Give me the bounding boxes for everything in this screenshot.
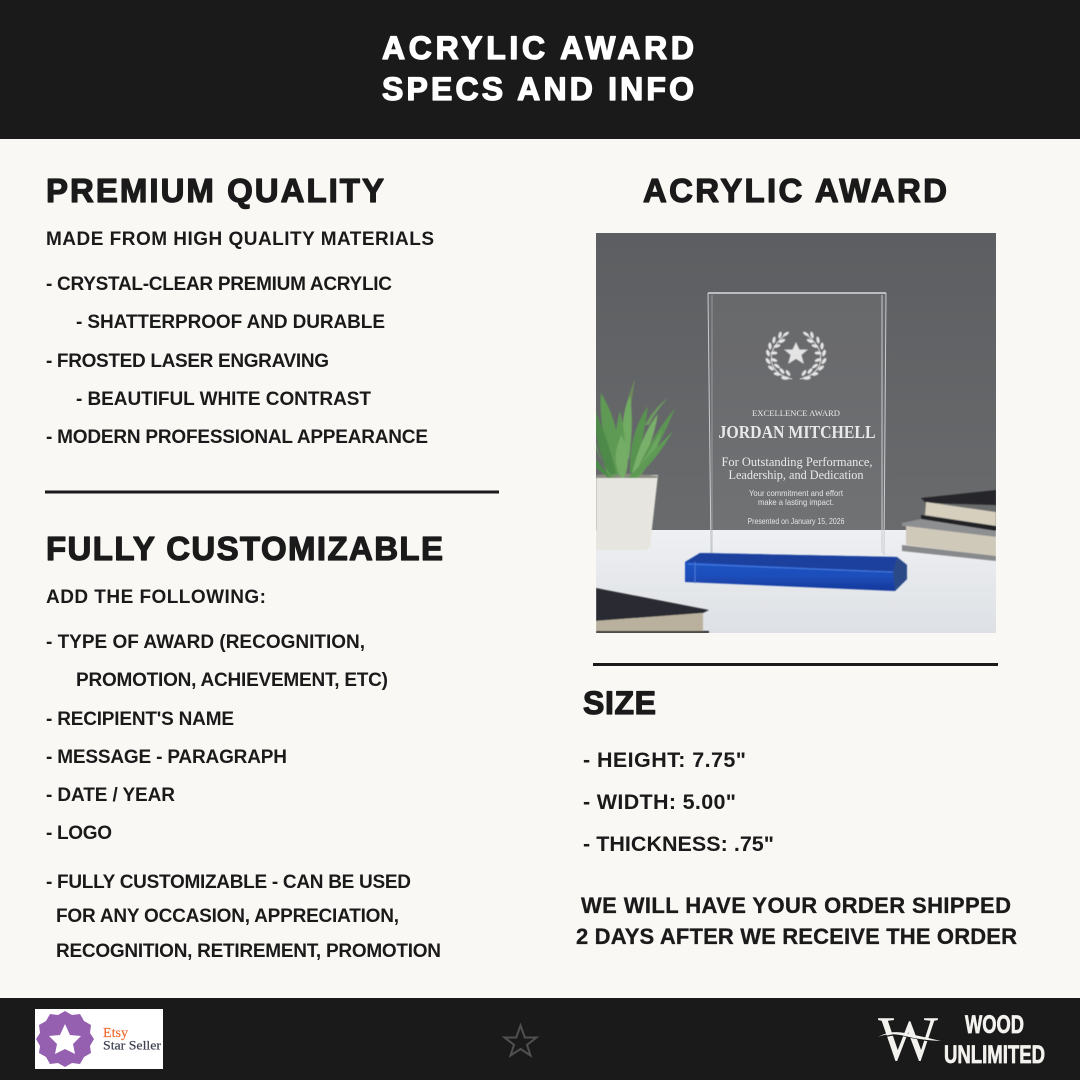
- heading: acrylic award: ACRYLIC AWARD: [643, 172, 947, 209]
- blue base: [685, 553, 907, 591]
- customization list: - FULLY CUSTOMIZABLE - CAN BE USED: [46, 872, 411, 893]
- panel: fully customizable: [46, 530, 443, 962]
- logo wordmark: WOOD: [965, 1011, 1024, 1039]
- quality list: - CRYSTAL-CLEAR PREMIUM ACRYLIC: [46, 274, 392, 295]
- dimensions list: - THICKNESS: .75": [583, 832, 774, 856]
- logo wordmark: UNLIMITED: [944, 1041, 1045, 1069]
- panel: size: [583, 685, 774, 856]
- customization list: RECOGNITION, RETIREMENT, PROMOTION: [56, 941, 441, 962]
- engraved text: [718, 408, 876, 526]
- wall: [596, 233, 996, 531]
- logo: wood unlimited: [878, 1003, 1045, 1074]
- engraved text: Your commitment and effort: [749, 488, 844, 498]
- heading: premium quality: PREMIUM QUALITY: [46, 172, 384, 209]
- engraved text: EXCELLENCE AWARD: [752, 408, 840, 418]
- quality list: - FROSTED LASER ENGRAVING: [46, 351, 329, 372]
- shipping note: 2 DAYS AFTER WE RECEIVE THE ORDER: [576, 924, 1017, 949]
- icon: potted plant: [593, 379, 675, 550]
- badge: etsy star seller: [35, 1009, 163, 1069]
- engraved text: Leadership, and Dedication: [728, 468, 864, 482]
- icon: W monogram: W: [878, 1003, 939, 1074]
- customization list: ADD THE FOLLOWING:: [46, 587, 266, 608]
- dimensions list: - WIDTH: 5.00": [583, 790, 736, 814]
- engraved text: JORDAN MITCHELL: [718, 422, 876, 442]
- quality list: - BEAUTIFUL WHITE CONTRAST: [76, 389, 371, 410]
- quality list: [46, 229, 434, 448]
- shipping note: [576, 893, 1017, 949]
- header band: [0, 0, 1080, 139]
- desk: [596, 530, 996, 633]
- quality list: MADE FROM HIGH QUALITY MATERIALS: [46, 229, 434, 250]
- customization list: - RECIPIENT'S NAME: [46, 709, 234, 730]
- badge text: [103, 1026, 162, 1052]
- product photo: [593, 233, 996, 633]
- quality list: - MODERN PROFESSIONAL APPEARANCE: [46, 427, 428, 448]
- icon: outline star: [504, 1026, 536, 1056]
- title: [382, 30, 694, 107]
- badge text: Star Seller: [103, 1038, 162, 1052]
- icon: purple seal: [36, 1011, 94, 1067]
- customization list: FOR ANY OCCASION, APPRECIATION,: [56, 906, 399, 927]
- dimensions list: - HEIGHT: 7.75": [583, 748, 746, 772]
- shipping note: WE WILL HAVE YOUR ORDER SHIPPED: [581, 893, 1011, 918]
- award: [685, 293, 907, 591]
- customization list: - TYPE OF AWARD (RECOGNITION,: [46, 632, 365, 653]
- heading: size: SIZE: [583, 685, 656, 721]
- customization list: [46, 587, 441, 962]
- engraved text: Presented on January 15, 2026: [748, 516, 845, 526]
- badge text: Etsy: [103, 1026, 128, 1041]
- footer band: [0, 998, 1080, 1080]
- icon: books right: [902, 490, 996, 561]
- icon: book front left: [596, 588, 709, 633]
- acrylic block: [708, 293, 886, 555]
- quality list: - SHATTERPROOF AND DURABLE: [76, 312, 385, 333]
- engraved text: make a lasting impact.: [758, 497, 834, 507]
- title: SPECS AND INFO: [382, 71, 694, 107]
- title: ACRYLIC AWARD: [382, 30, 694, 66]
- logo wordmark: [944, 1011, 1045, 1069]
- heading: fully customizable: FULLY CUSTOMIZABLE: [46, 530, 443, 567]
- customization list: PROMOTION, ACHIEVEMENT, ETC): [76, 670, 388, 691]
- dimensions list: [583, 748, 774, 856]
- customization list: - LOGO: [46, 823, 112, 844]
- icon: laurel star: [765, 331, 827, 380]
- customization list: - MESSAGE - PARAGRAPH: [46, 747, 287, 768]
- engraved text: For Outstanding Performance,: [722, 455, 872, 469]
- panel: premium quality: [46, 172, 434, 448]
- customization list: - DATE / YEAR: [46, 785, 175, 806]
